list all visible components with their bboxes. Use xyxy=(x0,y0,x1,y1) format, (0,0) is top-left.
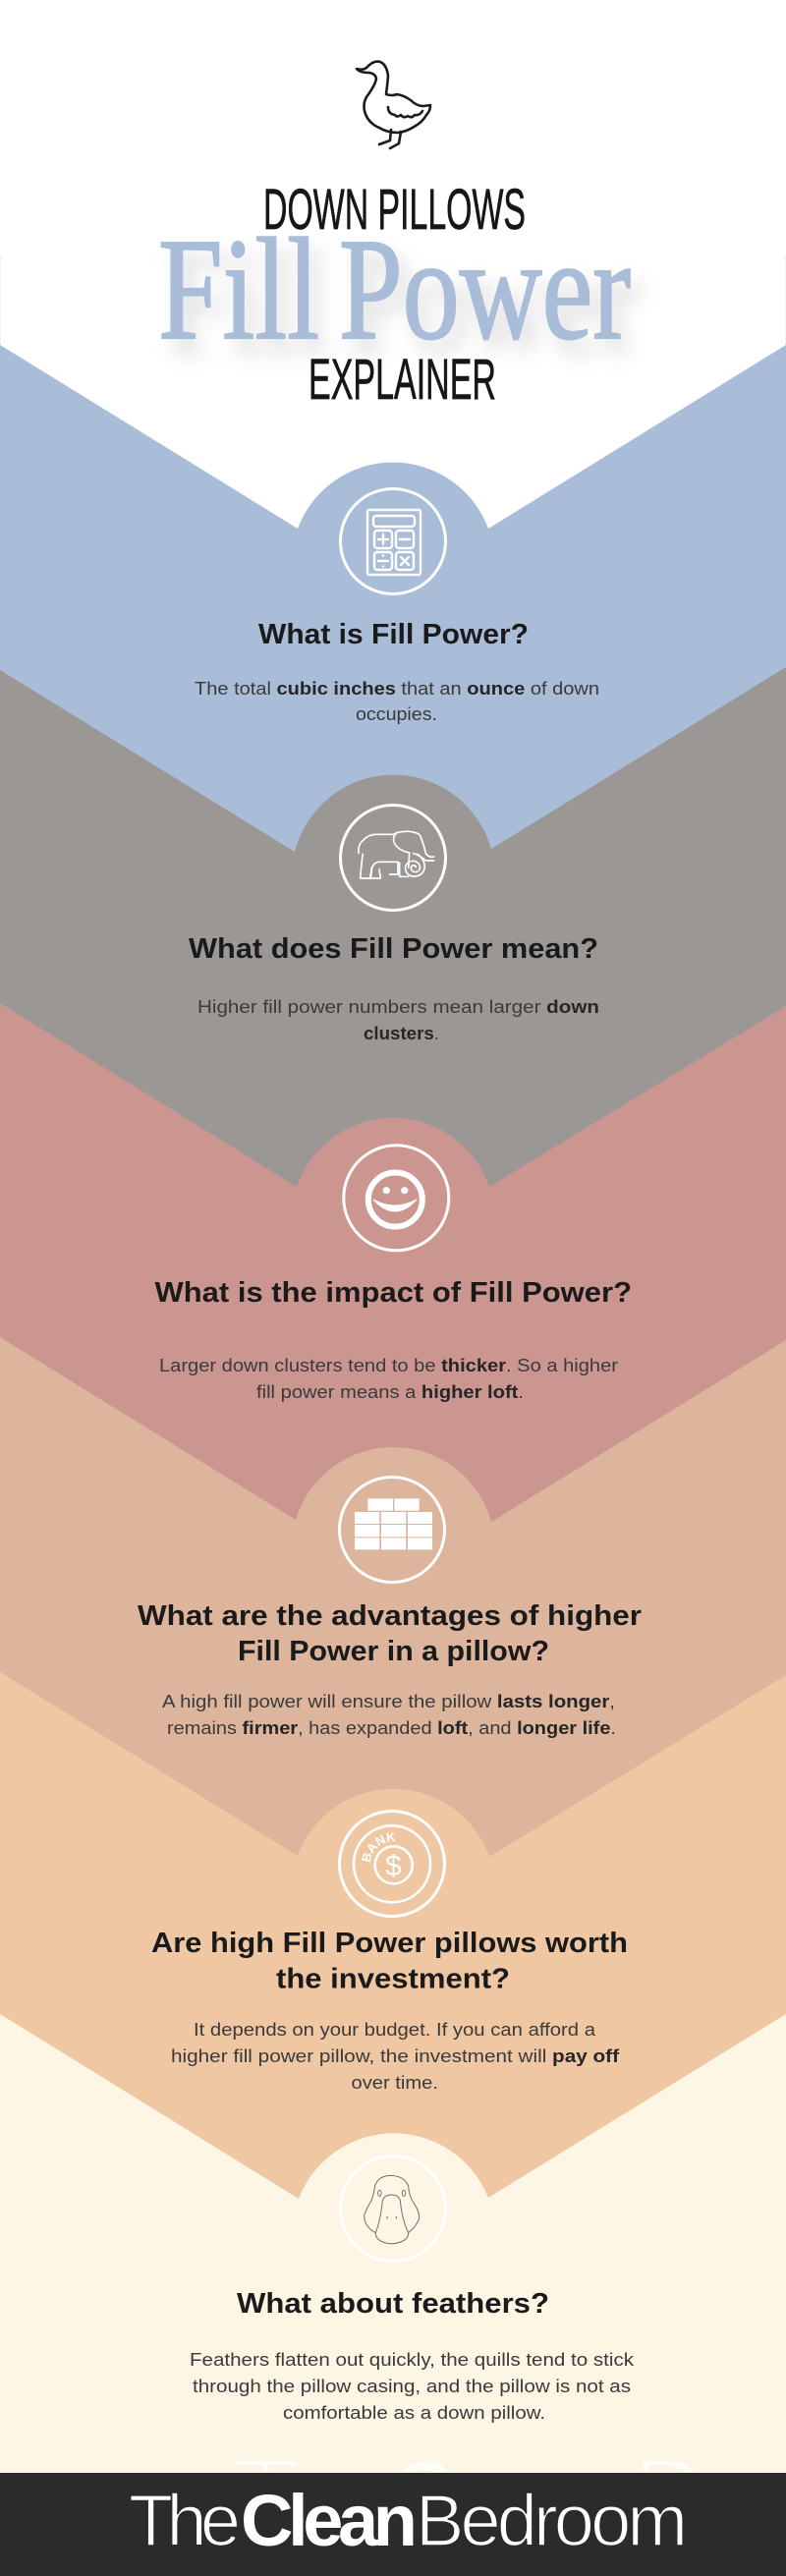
icon: smiley xyxy=(344,1146,449,1251)
body text xyxy=(171,2020,620,2093)
icon: bricks xyxy=(340,1478,444,1582)
body text: through the pillow casing, and the pillow is not as xyxy=(193,2377,631,2396)
footer bar xyxy=(0,2473,786,2576)
panel: what about feathers xyxy=(0,2014,786,2473)
heading: Are high Fill Power pillows worth xyxy=(151,1928,628,1959)
body text: Larger down clusters tend to be thicker . So a higher xyxy=(159,1356,618,1375)
heading: What is the impact of Fill Power? xyxy=(155,1277,632,1309)
body text: comfortable as a down pillow. xyxy=(283,2403,545,2423)
body text: A high fill power will ensure the pillow lasts longer , xyxy=(162,1692,615,1711)
logo: The Clean Bedroom xyxy=(129,2480,688,2561)
body text xyxy=(159,1356,618,1402)
body text: Higher fill power numbers mean larger down xyxy=(197,997,599,1017)
body text: fill power means a higher loft . xyxy=(256,1382,524,1402)
body text: over time. xyxy=(352,2073,438,2093)
icon: bank coin: BANK xyxy=(362,1832,396,1863)
panel: what is fill power xyxy=(0,345,786,855)
body text xyxy=(197,997,599,1043)
logo: The Clean Bedroom: Bedroom xyxy=(416,2480,688,2561)
heading: What about feathers? xyxy=(237,2288,549,2320)
heading xyxy=(151,1928,628,1994)
panel: advantages of higher fill power xyxy=(0,1337,786,1859)
body text: clusters. xyxy=(364,1024,439,1043)
heading: Fill Power in a pillow? xyxy=(238,1636,549,1667)
icon: bank coin xyxy=(338,1810,446,1918)
heading: What does Fill Power mean? xyxy=(189,933,598,965)
icon: elephant xyxy=(340,806,446,910)
icon: duck head xyxy=(340,2156,446,2262)
icon: calculator xyxy=(340,489,446,593)
title: Explainer: EXPLAINER xyxy=(309,348,496,412)
heading: What are the advantages of higher xyxy=(138,1600,642,1632)
title: Fill Power: Fill xyxy=(158,209,319,370)
title: Down Pillows: DOWN PILLOWS xyxy=(263,178,526,242)
body text: Feathers flatten out quickly, the quills tend to stick xyxy=(190,2350,635,2370)
body text: It depends on your budget. If you can afford a xyxy=(194,2020,596,2040)
body text xyxy=(162,1692,616,1738)
icon: bank coin: $ xyxy=(385,1850,402,1882)
logo: The Clean Bedroom: Clean xyxy=(241,2480,418,2561)
body text: occupies. xyxy=(356,704,437,724)
panel: what does fill power mean xyxy=(0,667,786,1189)
icon: goose xyxy=(357,62,430,148)
heading: What is Fill Power? xyxy=(258,619,529,650)
heading xyxy=(138,1600,642,1667)
panel: worth the investment xyxy=(0,1672,786,2199)
title: Fill Power xyxy=(158,209,631,370)
body text xyxy=(195,679,599,724)
body text: The total cubic inches that an ounce of down xyxy=(195,679,599,699)
logo: The Clean Bedroom: The xyxy=(129,2480,241,2561)
body text xyxy=(190,2350,635,2423)
heading: the investment? xyxy=(276,1963,510,1994)
panel: impact of fill power xyxy=(0,1003,786,1523)
title: Fill Power: Power xyxy=(339,209,631,370)
body text: higher fill power pillow, the investment will pay off xyxy=(171,2046,620,2066)
body text: remains firmer , has expanded loft, and longer life . xyxy=(167,1718,616,1738)
